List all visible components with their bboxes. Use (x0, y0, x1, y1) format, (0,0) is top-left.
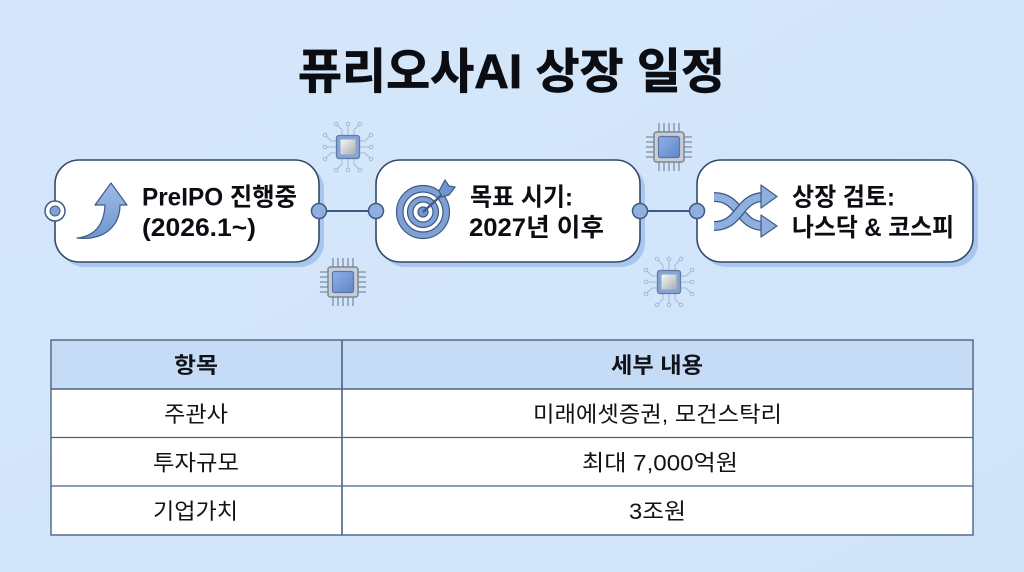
card text: date: (2026.1~) (142, 214, 256, 242)
row label: underwriter: 주관사 (164, 402, 228, 427)
node: card 3 left (690, 204, 704, 218)
table header: details: 세부 내용 (611, 353, 703, 378)
table (51, 340, 973, 535)
card text: year: 2027년 이후 (469, 214, 604, 242)
row value: underwriter: 미래에셋증권, 모건스탁리 (533, 402, 782, 427)
panel: target date card (376, 160, 645, 267)
panel: listing review card (697, 160, 978, 267)
row label: valuation: 기업가치 (153, 499, 238, 524)
node: card 2 left (368, 204, 384, 218)
title: 퓨리오사AI 상장 일정 (298, 46, 725, 99)
row label: investment: 투자규모 (153, 450, 239, 476)
card text: PreIPO: PreIPO 진행중 (142, 184, 297, 212)
row value: valuation: 3조원 (629, 499, 686, 524)
connector: card 1 to card 2 (319, 210, 376, 212)
node: card 1 right (312, 204, 326, 218)
icon: crossing arrows (714, 185, 777, 237)
icon: target (396, 180, 455, 238)
card text: markets: 나스닥 & 코스피 (792, 214, 954, 242)
connector: card 2 to card 3 (640, 210, 697, 212)
card text: target: 목표 시기: (470, 184, 573, 212)
icon: rising arrow (77, 183, 127, 238)
icon: circuit chip top left (323, 122, 373, 172)
start node (45, 201, 65, 221)
panel: PreIPO card (55, 160, 324, 267)
icon: plain chip top right (646, 123, 692, 171)
row value: investment: 최대 7,000억원 (582, 450, 738, 476)
icon: plain chip bottom left (320, 258, 366, 306)
card text: review: 상장 검토: (792, 184, 895, 212)
icon: circuit chip bottom right (644, 257, 694, 307)
node: card 2 right (632, 204, 648, 218)
table header: item: 항목 (174, 353, 218, 378)
